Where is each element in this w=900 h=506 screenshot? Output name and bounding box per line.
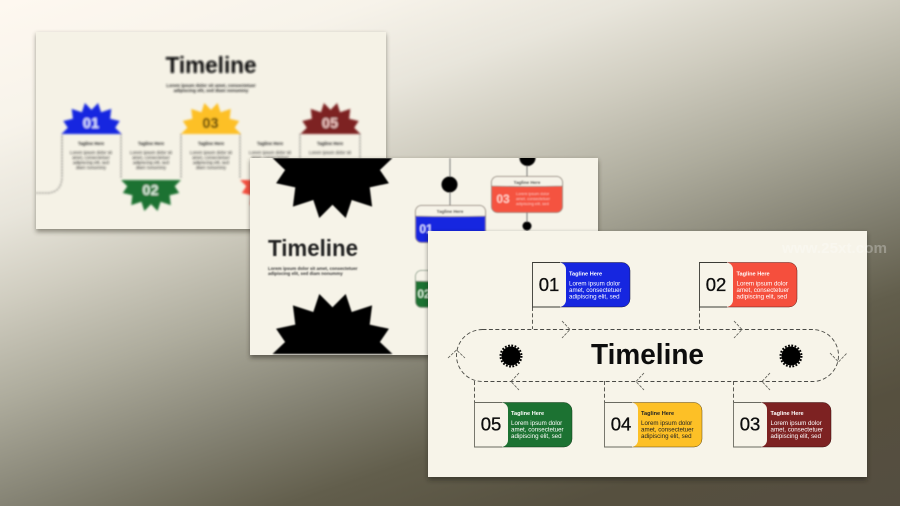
card: 01 blue: adipiscing elit, sed [569,294,620,300]
icon: large black star bottom [272,294,392,354]
icon: red star 04 [239,178,250,206]
card: 03 maroon [734,402,831,447]
icon: maroon star 05 [300,103,360,134]
text block: column captions: adipiscing elit, sed [193,160,229,165]
card: 05 green: Lorem ipsum dolor [511,420,562,427]
card: 03 maroon: amet, consectetuer [770,426,823,434]
connector lines and nodes [442,150,536,232]
card: 03 red: amet, consectetuer [516,196,551,201]
card: 05 green: adipiscing elit, sed [511,433,562,440]
text block: column captions: Tagline Here [78,141,105,146]
heading: middle slide title: Timeline [268,235,358,261]
text block: column captions: amet, consectetuer [251,155,289,160]
text block: column captions: Lorem ipsum dolor sit [190,150,233,155]
card: 05 green: 05 [481,414,501,434]
card: 01 blue: 01 [539,274,559,295]
icon: maroon star 05: 05 [322,116,338,132]
text block: column captions: amet, consectetuer [132,155,170,160]
card: 01 blue: 01 [419,222,433,236]
panel: back slide, numbered stars timeline [36,32,386,232]
icon: blue star 01 [62,103,122,134]
card: 02 red [700,262,797,307]
text block: column captions: diam nonummy [196,165,227,170]
card: 04 yellow [604,402,702,447]
panel: front slide, looped timeline [428,231,867,480]
icon: right sunburst [780,346,802,366]
text block: column captions: diam nonummy [136,165,167,170]
card: 03 red [492,176,562,212]
card: 04 yellow: Lorem ipsum dolor [641,420,692,427]
text block: middle slide subtitle: adipiscing elit, sed diam nonummy [268,271,343,276]
card: 04 yellow: Tagline Here [641,411,674,417]
text block: column captions: amet, consectetuer [72,155,110,160]
card: 03 red: adipiscing elit, sed [516,201,549,206]
icon: green star 02: 02 [142,183,159,199]
card: 03 red: Tagline Here [514,180,541,185]
icon: blue star 01: 01 [83,116,99,132]
text block: column captions [70,141,352,170]
text block: back slide subtitle: adipiscing elit, sed diam nonummy [174,88,249,93]
card: green: 02 [417,287,431,301]
card: 01 blue: Tagline Here [437,209,464,214]
card: 04 yellow: 04 [611,414,631,434]
card: 02 red: 02 [706,274,726,295]
text block: column captions: adipiscing elit, sed [73,160,109,165]
card: 02 red: Lorem ipsum dolor [736,280,788,288]
dotted path linking the columns [36,134,360,193]
panel: middle slide, vertical timeline [250,150,598,358]
card: 05 green: amet, consectetuer [511,426,564,434]
heading: main title: Timeline [591,339,704,371]
card: 01 blue: Tagline Here [569,272,602,278]
text block: column captions: Tagline Here [317,141,344,146]
card: 04 yellow: adipiscing elit, sed [641,433,692,440]
card: 03 red: Lorem ipsum dolor [516,191,550,196]
card: 03 maroon: adipiscing elit, sed [770,433,822,440]
text block: middle slide subtitle [268,266,358,276]
card: 04 yellow: amet, consectetuer [641,426,694,434]
dashed connectors [474,307,734,402]
icon: left sunburst [500,346,522,366]
heading: back slide title: Timeline [166,52,256,78]
text block: column captions: amet, consectetuer [192,155,230,160]
text block: column captions: adipiscing elit, sed [133,160,169,165]
text block: column captions: Tagline Here [198,141,225,146]
text block: column captions: Tagline Here [138,141,165,146]
text block: middle slide subtitle: Lorem ipsum dolor sit amet, consectetuer [268,266,358,271]
card: 03 maroon: 03 [740,414,760,434]
card: 05 green: Tagline Here [511,411,544,417]
card: green [414,269,428,309]
icon: yellow star 03: 03 [202,116,219,132]
card: 01 blue [532,262,630,307]
text block: column captions: Lorem ipsum dolor sit [309,150,352,155]
card: 03 maroon: Tagline Here [770,411,804,417]
card: 01 blue: Lorem ipsum dolor [569,280,620,288]
text block: column captions: Tagline Here [257,141,284,146]
card: 02 red: Tagline Here [736,272,770,278]
card: 03 red: 03 [496,192,510,206]
arrows on the loop [448,321,847,390]
icon: yellow star 03 [181,103,241,134]
text block: back slide subtitle: Lorem ipsum dolor sit amet, consectetuer [166,83,256,88]
watermark: www.25xt.com [781,240,887,257]
card: 02 red: adipiscing elit, sed [736,294,788,300]
text block: column captions: diam nonummy [76,165,107,170]
card: 01 blue [416,206,486,242]
text block: back slide subtitle [166,83,256,93]
card: 01 blue: amet, consectetuer [569,287,622,294]
icon: green star 02 [121,180,181,211]
text block: column captions: Lorem ipsum dolor sit [70,150,113,155]
card: 05 green [474,402,572,447]
card: 03 maroon: Lorem ipsum dolor [770,420,822,427]
text block: column captions: Lorem ipsum dolor sit [130,150,173,155]
icon: large black star top [272,158,392,218]
dashed loop track [456,330,838,382]
text block: column captions: Lorem ipsum dolor sit [249,150,292,155]
card: 02 red: amet, consectetuer [736,287,789,294]
